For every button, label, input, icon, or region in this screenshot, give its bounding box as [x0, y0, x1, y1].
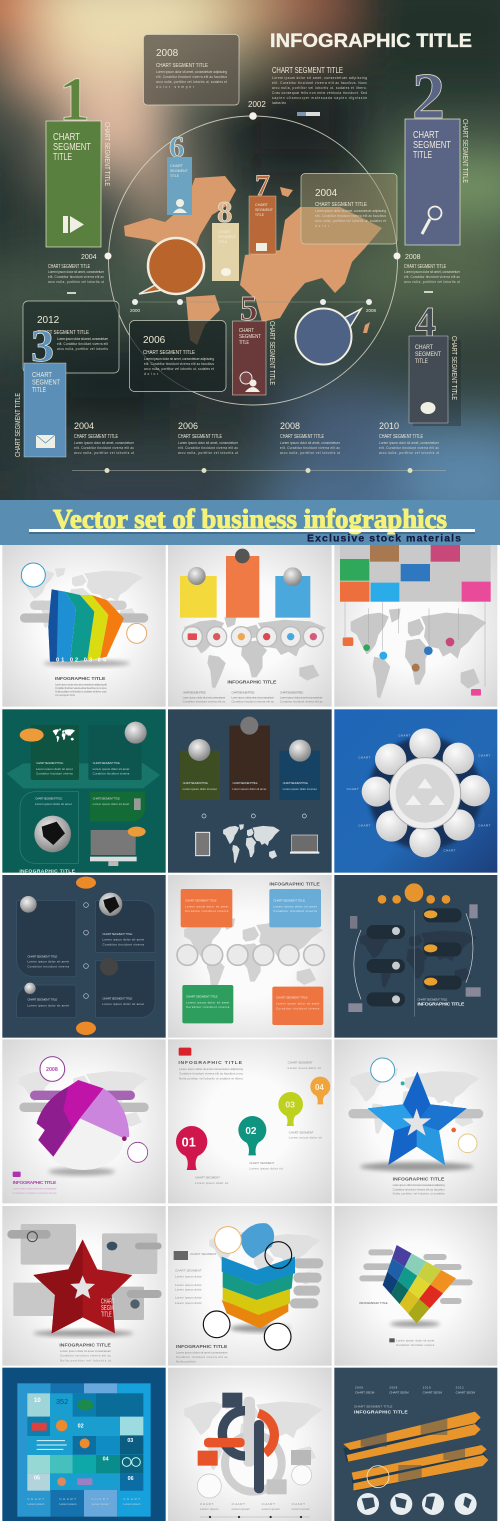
tile: green dashboard: Curabitur tincidunt viverra	[93, 772, 130, 776]
timeline block 2010	[379, 421, 440, 455]
tag 1: CHART SEGMENT TITLE	[103, 122, 112, 186]
tile: rings and ribbons: CHART	[292, 1502, 305, 1506]
tile: blue mosaic: 02	[78, 1423, 84, 1429]
tag 1: TITLE	[53, 152, 72, 163]
tile: dark rounded panels: Curabitur tincidunt viverra	[102, 942, 144, 946]
tile: circle cluster	[334, 709, 497, 873]
tag 8: SEGMENT	[218, 234, 237, 239]
tile: column chart: Nulla porttitor vel lobortis ut sodales et libero cras	[55, 690, 107, 694]
tag 6: 6	[169, 129, 184, 164]
tile: circle cluster: CHART	[358, 755, 371, 759]
tile: blue mosaic: 03	[127, 1438, 133, 1444]
tile: three tabs with globes: Curabitur tincidunt viverra elit ac	[183, 700, 226, 704]
tile: green dashboard: Curabitur tincidunt viverra	[36, 772, 73, 776]
timeline block 2004: elit. Curabitur tincidunt viverra elit ac	[74, 446, 134, 450]
timeline block 2010: CHART SEGMENT TITLE	[379, 434, 423, 440]
callout: 2004: 2004	[315, 188, 338, 199]
tile: red star: Lorem ipsum dolor sit amet consectetuer	[60, 1349, 111, 1353]
banner subtitle: Exclusive stock materials	[307, 532, 461, 544]
tile: stacked blocks: CHART SEGMENT	[190, 1252, 217, 1256]
tile: rings and ribbons: Lorem ipsum	[200, 1507, 219, 1511]
tag 5: CHART	[239, 328, 254, 334]
callout: 2006	[130, 320, 226, 392]
tile: red star: Nulla porttitor vel lobortis ut	[60, 1358, 111, 1362]
timeline block 2010: arcu nulla, porttitor vel lobortis ut	[379, 451, 439, 455]
tile: balloon pins: Lorem ipsum dolor sit amet consectetuer adipiscing	[179, 1067, 243, 1071]
inner timeline	[130, 299, 377, 313]
tile: stacked blocks: Nulla porttitor	[176, 1360, 196, 1364]
tile: blue star	[334, 1039, 497, 1203]
tag 1	[46, 66, 112, 247]
tile: stacked blocks: Curabitur tincidunt viverra elit ac	[176, 1355, 228, 1359]
tile: colour grid and map	[334, 545, 497, 707]
tile: balloon pins: CHART SEGMENT	[288, 1061, 313, 1065]
tile: three tabs with globes	[168, 545, 332, 707]
tile: stacked blocks: Lorem ipsum dolor	[175, 1296, 202, 1300]
tile: green dashboard: CHART SEGMENT TITLE	[35, 796, 62, 800]
timeline block 2008: elit. Curabitur tincidunt viverra elit ac	[280, 446, 340, 450]
tile: blue mosaic	[2, 1368, 166, 1521]
callout: 2006: CHART SEGMENT TITLE	[143, 350, 196, 356]
tag 5: SEGMENT	[239, 334, 262, 340]
tile: colour cube: Lorem ipsum dolor sit amet	[396, 1338, 434, 1342]
callout: 2004: CHART SEGMENT TITLE	[315, 202, 368, 208]
tile: orange ribbons and globes: 2006	[355, 1385, 363, 1389]
callout: 2012: CHART SEGMENT TITLE	[37, 330, 90, 336]
tile: circle cluster: CHART	[478, 754, 491, 758]
tile: blue mosaic: CHART	[123, 1497, 140, 1501]
callout: 2012: elit. Curabitur tincidunt viverra elit	[57, 342, 108, 346]
timeline arc	[108, 116, 398, 405]
tile: dark rounded panels: CHART SEGMENT TITLE	[102, 932, 132, 936]
callout: 2004: arcu nulla, porttitor vel lobortis ut, sodales et	[315, 219, 386, 223]
tile: orange ribbons and globes: CHART SEGM	[355, 1390, 375, 1394]
callout: 2008: dolor semper	[156, 85, 195, 89]
tile: colour cards and rings: Curabitur tincidunt viverra	[186, 1005, 230, 1009]
tile: blue mosaic: CHART	[27, 1497, 44, 1501]
tag 1: SEGMENT	[53, 142, 91, 153]
tile: colour cards and rings: CHART SEGMENT TITLE	[273, 898, 305, 902]
tile: circle cluster: CHART	[443, 849, 456, 853]
tile: dark tabs with globes: Lorem ipsum dolor sit amet	[283, 787, 317, 791]
tile: blue mosaic: Lorem ipsum	[27, 1502, 45, 1506]
text block: top: CHART SEGMENT TITLE	[272, 66, 343, 75]
tile: stacked blocks	[168, 1206, 332, 1366]
tile: rings and ribbons: CHART	[200, 1502, 214, 1506]
tile: colour cards and rings: Lorem ipsum dolor sit amet	[186, 1000, 229, 1004]
tile: dark tabs with globes: CHART SEGMENT TITLE	[183, 781, 208, 785]
tile: dark tabs with globes: CHART SEGMENT TITLE	[232, 781, 258, 785]
tile: colour cards and rings: CHART SEGMENT TITLE	[185, 898, 217, 902]
tile: magenta disc: 2008	[46, 1067, 58, 1073]
tile: balloon pins: Lorem ipsum dolor sit	[288, 1066, 321, 1070]
tag 5: TITLE	[239, 340, 249, 346]
tag 5: 5	[240, 289, 258, 328]
tile: dark rounded panels: CHART SEGMENT TITLE	[27, 954, 57, 958]
tile: blue mosaic: 05	[34, 1475, 40, 1481]
tag 3: TITLE	[32, 387, 46, 394]
tag 8: CHART	[218, 229, 232, 234]
tile: balloon pins: 02	[245, 1126, 257, 1137]
tile: orange ribbons and globes: CHART SEGMENT TITLE	[354, 1404, 392, 1408]
tag 7: 7	[255, 169, 270, 202]
tile: colour cube	[334, 1206, 497, 1366]
tile: balloon pins: Lorem ipsum dolor sit	[195, 1181, 228, 1185]
tile: magenta disc: Lorem ipsum dolor sit amet consectetuer	[13, 1186, 57, 1190]
tile: circle cluster: CHART	[398, 734, 411, 738]
tile: green dashboard: CHART SEGMENT TITLE	[93, 796, 120, 800]
tile: dark tabs with globes	[168, 709, 332, 873]
tile: colour cards and rings: Curabitur tincidunt viverra	[273, 909, 317, 913]
callout: 2006: arcu nulla, porttitor vel lobortis ut, sodales et	[144, 367, 214, 371]
timeline block 2004: 2004	[74, 421, 94, 431]
callout: 2012: Lorem ipsum dolor sit amet, consectetuer	[57, 337, 109, 341]
tile: green dashboard: CHART SEGMENT TITLE	[36, 761, 63, 765]
tile: rings and ribbons: Lorem ipsum	[232, 1507, 250, 1511]
tag 6: SEGMENT	[170, 168, 189, 173]
side text: right: Lorem ipsum dolor sit amet, consectetuer	[404, 270, 461, 274]
tile: blue star: Nulla porttitor vel lobortis ut sodales	[393, 1192, 445, 1196]
tile: blue star: INFOGRAPHIC TITLE	[393, 1177, 445, 1183]
tile: blue mosaic: 06	[128, 1476, 134, 1482]
tile: orange ribbons and globes: INFOGRAPHIC TITLE	[354, 1409, 408, 1415]
tile: balloon pins: Lorem ipsum dolor sit	[249, 1166, 283, 1170]
tag 8: TITLE	[218, 239, 227, 244]
timeline block 2004	[74, 421, 135, 455]
tag 6	[167, 129, 192, 215]
timeline marker 2008: 2008	[405, 254, 421, 261]
callout: 2008: arcu nulla, porttitor vel lobortis ut, sodales et	[156, 80, 227, 84]
tile: blue star: Curabitur tincidunt viverra elit ac faucibus	[393, 1187, 445, 1191]
tile: dark rounded panels: Curabitur tincidunt viverra	[27, 964, 69, 968]
tile: radial timeline dark	[334, 875, 497, 1038]
tile: stacked blocks: Lorem ipsum dolor sit amet consectetuer	[176, 1350, 228, 1354]
tag 4	[409, 300, 461, 426]
side text: left: Lorem ipsum dolor sit amet, consectetuer	[48, 270, 105, 274]
tile: radial timeline dark: CHART SEGMENT TITLE	[417, 998, 447, 1002]
side text: right: arcu nulla, porttitor vel lobortis ut	[404, 280, 460, 284]
tile: dark tabs with globes: CHART SEGMENT TITLE	[283, 781, 308, 785]
timeline block 2006	[178, 421, 239, 455]
tag 1: 1	[59, 66, 90, 134]
timeline marker 2002	[248, 100, 266, 120]
callout: 2008	[144, 34, 239, 105]
side text: left: elit. Curabitur tincidunt viverra elit ac	[48, 275, 104, 279]
tile: orange ribbons and globes: 2012	[456, 1385, 464, 1389]
tile: orange ribbons and globes: CHART SEGM	[423, 1390, 442, 1394]
tag 6: CHART	[170, 163, 184, 168]
tile: three tabs with globes: CHART SEGMENT TITLE	[280, 690, 303, 694]
timeline block 2010: Lorem ipsum dolor sit amet, consectetuer	[379, 441, 440, 445]
tile: balloon pins: 03	[285, 1099, 295, 1109]
tile: three tabs with globes: Lorem ipsum dolor sit amet consectetuer	[183, 695, 225, 699]
text block: top: arcu nulla, porttitor vel lobortis ut, sodales et libero.	[272, 86, 367, 90]
tile: blue mosaic: CHART	[92, 1497, 109, 1501]
speech bubble: orange	[139, 238, 204, 294]
timeline block 2006: arcu nulla, porttitor vel lobortis ut	[178, 451, 238, 455]
tag 2: SEGMENT	[413, 140, 451, 151]
callout: 2012: arcu nulla, porttitor vel lobortis	[57, 347, 108, 351]
callout: 2006: 2006	[143, 335, 166, 346]
timeline block 2004: Lorem ipsum dolor sit amet, consectetuer	[74, 441, 135, 445]
callout: 2004	[301, 174, 397, 244]
text block: top: Cras consequat felis non enim vehicula tincidunt. Sed	[272, 91, 367, 95]
tile: stacked blocks: Lorem ipsum dolor	[175, 1274, 202, 1278]
text block: top: luctus leo	[272, 101, 286, 105]
tag 3	[15, 320, 66, 457]
tile: balloon pins: CHART SEGMENT	[289, 1130, 314, 1134]
tile: three tabs with globes: CHART SEGMENT TITLE	[183, 690, 206, 694]
tile: column chart: Curabitur tincidunt viverra elit ac faucibus nunc arcu	[55, 686, 107, 690]
tile: green dashboard: Lorem ipsum dolor sit amet	[93, 802, 129, 806]
tile: rings and ribbons: Lorem ipsum	[292, 1507, 310, 1511]
timeline block 2008: CHART SEGMENT TITLE	[280, 434, 324, 440]
tile: colour cards and rings: Lorem ipsum dolor sit amet	[273, 904, 317, 908]
tag 7	[249, 169, 276, 254]
tile: colour cards and rings: CHART SEGMENT TITLE	[186, 994, 218, 998]
text block: top: elit. Curabitur tincidunt viverra elit ac faucibus. Nunc	[272, 81, 367, 85]
callout: 2008: elit. Curabitur tincidunt viverra elit ac faucibus	[156, 75, 227, 79]
tile: orange ribbons and globes: 2010	[423, 1385, 431, 1389]
tag 2	[405, 60, 470, 245]
side text: left: CHART SEGMENT TITLE	[48, 264, 90, 270]
tile: red star: Curabitur tincidunt viverra elit ac	[60, 1354, 111, 1358]
tile: green dashboard: Lorem ipsum dolor sit amet	[35, 802, 72, 806]
speech bubble: slate	[296, 308, 361, 364]
tile: radial timeline dark: INFOGRAPHIC TITLE	[417, 1002, 465, 1008]
side text: left	[48, 264, 105, 294]
tile: green dashboard: Lorem ipsum dolor sit amet	[36, 767, 73, 771]
callout: 2008: 2008	[156, 48, 179, 59]
timeline marker 2008	[394, 252, 421, 261]
tile: red star	[2, 1206, 166, 1366]
tile: balloon pins	[168, 1039, 332, 1203]
tag 7: CHART	[255, 202, 269, 207]
tile: green dashboard: INFOGRAPHIC TITLE	[19, 869, 76, 875]
tile: green dashboard: Lorem ipsum dolor sit amet	[93, 767, 129, 771]
tile: colour cards and rings: Lorem ipsum dolor sit amet	[276, 1002, 319, 1006]
tag 3: SEGMENT	[32, 380, 61, 386]
callout: 2012	[23, 301, 119, 373]
tile: colour cube: INFOGRAPHIC TITLE	[359, 1301, 388, 1305]
tag 8	[212, 194, 239, 281]
tile: dark rounded panels: Lorem ipsum dolor sit amet	[102, 1002, 144, 1006]
text block: top: sapien ullamcorper malesuada sapien dignissim	[272, 96, 367, 100]
tile: circle cluster: CHART	[347, 787, 359, 791]
world map	[124, 176, 382, 345]
callout: 2006: dolor	[144, 372, 159, 376]
tile: dark rounded panels: Lorem ipsum dolor sit amet	[102, 938, 144, 942]
tag 2: CHART SEGMENT TITLE	[461, 119, 470, 183]
tile: dark rounded panels	[2, 875, 166, 1038]
tile: balloon pins: Nulla porttitor vel lobortis ut sodales et libero	[179, 1076, 243, 1080]
tag 2: TITLE	[413, 150, 432, 161]
tile: rings and ribbons: Lorem ipsum	[262, 1507, 280, 1511]
tile: red star: CHART	[101, 1298, 115, 1305]
tile: blue mosaic: Lorem ipsum	[59, 1502, 77, 1506]
tile: balloon pins: Lorem ipsum dolor sit	[289, 1136, 322, 1140]
callout: 2004: elit. Curabitur tincidunt viverra elit ac faucibus	[315, 214, 386, 218]
tile: blue mosaic: CHART	[59, 1497, 76, 1501]
tile: stacked blocks: INFOGRAPHIC TITLE	[176, 1344, 228, 1350]
timeline block 2008: Lorem ipsum dolor sit amet, consectetuer	[280, 441, 341, 445]
tile: balloon pins: 04	[315, 1083, 324, 1092]
tile: circle cluster: CHART	[358, 824, 371, 828]
tag 7: TITLE	[255, 212, 264, 217]
bottom timeline	[72, 468, 446, 473]
tile: rings and ribbons: CHART	[232, 1502, 245, 1506]
tile: dark tabs with globes: Lorem ipsum dolor sit amet	[232, 787, 266, 791]
tile: circle cluster: CHART	[478, 824, 491, 828]
tile: rings and ribbons: CHART	[262, 1502, 275, 1506]
callout: 2008: CHART SEGMENT TITLE	[156, 63, 209, 69]
tile: stacked blocks: CHART SEGMENT	[175, 1269, 202, 1273]
side text: right: CHART SEGMENT TITLE	[404, 264, 446, 270]
callout: 2008: Lorem ipsum dolor sit amet, consectetuer adipiscing	[156, 70, 227, 74]
callout: 2012: 2012	[37, 315, 60, 326]
timeline marker 2004	[81, 252, 112, 261]
tile: orange ribbons and globes: CHART SEGM	[456, 1390, 475, 1394]
tile: rings and ribbons	[168, 1368, 332, 1521]
inner timeline: 2008	[366, 308, 377, 313]
side text: right: elit. Curabitur tincidunt viverra elit ac	[404, 275, 460, 279]
tile: dark rounded panels: CHART SEGMENT TITLE	[27, 998, 57, 1002]
timeline block 2004: arcu nulla, porttitor vel lobortis ut	[74, 451, 134, 455]
tile: column chart	[2, 545, 166, 707]
tag 4: CHART	[415, 344, 433, 351]
tag 3: 3	[31, 320, 54, 371]
tile: red star: SEGM	[101, 1305, 114, 1312]
tag 4: CHART SEGMENT TITLE	[450, 336, 457, 400]
tile: blue mosaic: Lorem ipsum	[123, 1502, 141, 1506]
timeline block 2006: elit. Curabitur tincidunt viverra elit ac	[178, 446, 238, 450]
side text: left: arcu nulla, porttitor vel lobortis ut	[48, 280, 104, 284]
timeline marker 2004: 2004	[81, 254, 97, 261]
timeline block 2008: 2008	[280, 421, 300, 431]
tile: column chart: INFOGRAPHIC TITLE	[55, 676, 106, 682]
timeline block 2010: 2010	[379, 421, 399, 431]
tile: balloon pins: INFOGRAPHIC TITLE	[178, 1060, 243, 1066]
tile: three tabs with globes: Curabitur tincidunt viverra elit ac	[231, 700, 274, 704]
tag 1: CHART	[53, 132, 80, 143]
tile: dark rounded panels: Lorem ipsum dolor sit amet	[27, 960, 69, 964]
timeline marker 2002: 2002	[248, 100, 266, 109]
tag 4: 4	[415, 300, 436, 346]
timeline block 2004: CHART SEGMENT TITLE	[74, 434, 118, 440]
timeline block 2008	[280, 421, 341, 455]
text block: top	[272, 66, 367, 116]
tag 6: TITLE	[170, 173, 179, 178]
tile: column chart: Lorem ipsum dolor sit amet consectetuer adipiscing elit	[55, 682, 107, 686]
tag 7: SEGMENT	[255, 207, 274, 212]
tag 2: CHART	[413, 130, 439, 141]
title: INFOGRAPHIC TITLE	[270, 31, 472, 52]
timeline block 2006: Lorem ipsum dolor sit amet, consectetuer	[178, 441, 239, 445]
tile: column chart: 01 02 03 04	[56, 657, 107, 663]
tile: column chart: consequat felis	[55, 693, 75, 697]
tile: magenta disc: Curabitur tincidunt viverra elit ac	[13, 1191, 57, 1195]
tag 3: CHART	[32, 372, 53, 379]
tile: stacked blocks: Lorem ipsum dolor	[175, 1288, 202, 1292]
tile: stacked blocks: Lorem ipsum dolor	[175, 1301, 202, 1305]
tile: colour cards and rings: Curabitur tincidunt viverra	[185, 909, 229, 913]
tile: orange ribbons and globes: CHART SEGM	[389, 1390, 409, 1394]
timeline block 2006: CHART SEGMENT TITLE	[178, 434, 222, 440]
banner title: Vector set of business infographics	[53, 504, 447, 534]
tile: balloon pins: Curabitur tincidunt viverra elit ac faucibus nunc	[179, 1072, 243, 1076]
tag 3: CHART SEGMENT TITLE	[15, 393, 22, 457]
tag 5	[232, 289, 275, 395]
tile: three tabs with globes: CHART SEGMENT TITLE	[231, 690, 255, 694]
tile: blue mosaic: 04	[103, 1457, 109, 1463]
tile: orange ribbons and globes: 2008	[389, 1385, 398, 1389]
callout: 2004: dolor	[315, 224, 330, 228]
tile: orange ribbons and globes	[334, 1368, 497, 1521]
hero infographic	[0, 0, 500, 500]
tile: green dashboard	[2, 709, 166, 875]
tile: colour cube: Curabitur tincidunt viverra	[396, 1343, 435, 1347]
tile: blue mosaic: 10	[34, 1398, 41, 1404]
tile: dark rounded panels: CHART SEGMENT TITLE	[102, 996, 132, 1000]
banner	[0, 500, 500, 545]
tile: balloon pins: 01	[182, 1136, 196, 1150]
tile: balloon pins: CHART SEGMENT	[195, 1176, 220, 1180]
callout: 2004: Lorem ipsum dolor sit amet, consectetuer adipiscing	[315, 209, 386, 213]
timeline block 2006: 2006	[178, 421, 198, 431]
tile: colour cards and rings: CHART SEGMENT TITLE	[276, 996, 308, 1000]
tag 5: CHART SEGMENT TITLE	[268, 321, 275, 385]
text block: top: Lorem ipsum dolor sit amet, consectetuer adipiscing	[272, 76, 367, 80]
tile: dark tabs with globes: Lorem ipsum dolor sit amet	[183, 787, 217, 791]
tile: blue mosaic: Lorem ipsum	[92, 1502, 109, 1506]
tile: three tabs with globes: Lorem ipsum dolor sit amet consectetuer	[280, 695, 323, 699]
timeline block 2008: arcu nulla, porttitor vel lobortis ut	[280, 451, 340, 455]
tile: red star: INFOGRAPHIC TITLE	[59, 1343, 111, 1349]
tile: colour cards and rings	[168, 875, 332, 1038]
tile: colour cards and rings: Lorem ipsum dolor sit amet	[185, 904, 228, 908]
tile: magenta disc: INFOGRAPHIC TITLE	[13, 1180, 57, 1186]
tile: dark rounded panels: Lorem ipsum dolor sit amet	[27, 1004, 69, 1008]
timeline block 2010: elit. Curabitur tincidunt viverra elit ac	[379, 446, 439, 450]
inner timeline: 2000	[130, 308, 141, 313]
tile: colour cards and rings: INFOGRAPHIC TITLE	[269, 881, 320, 887]
tag 4: SEGMENT	[415, 351, 441, 358]
tile: magenta disc	[2, 1039, 166, 1203]
tile: three tabs with globes: Curabitur tincidunt viverra elit ac	[280, 700, 323, 704]
side text: right	[404, 264, 461, 293]
tag 8: 8	[217, 194, 232, 229]
tile: blue star: Lorem ipsum dolor sit amet consectetuer adipiscing	[393, 1183, 445, 1187]
tile: colour cards and rings: Curabitur tincidunt viverra	[276, 1006, 320, 1010]
tile: balloon pins: CHART SEGMENT	[249, 1161, 275, 1165]
tile: green dashboard: CHART SEGMENT TITLE	[93, 761, 120, 765]
tile: blue mosaic: 352	[56, 1397, 68, 1406]
callout: 2006: Lorem ipsum dolor sit amet, consectetuer adipiscing	[144, 357, 214, 361]
tile: three tabs with globes: Lorem ipsum dolor sit amet consectetuer	[231, 695, 274, 699]
tag 4: TITLE	[415, 358, 428, 365]
tile: three tabs with globes: INFOGRAPHIC TITLE	[227, 680, 277, 686]
tile: stacked blocks: Lorem ipsum dolor	[175, 1283, 202, 1287]
tag 2: 2	[412, 60, 445, 133]
callout: 2006: elit. Curabitur tincidunt viverra elit ac faucibus	[144, 362, 214, 366]
tile: red star: TITLE	[101, 1312, 112, 1319]
